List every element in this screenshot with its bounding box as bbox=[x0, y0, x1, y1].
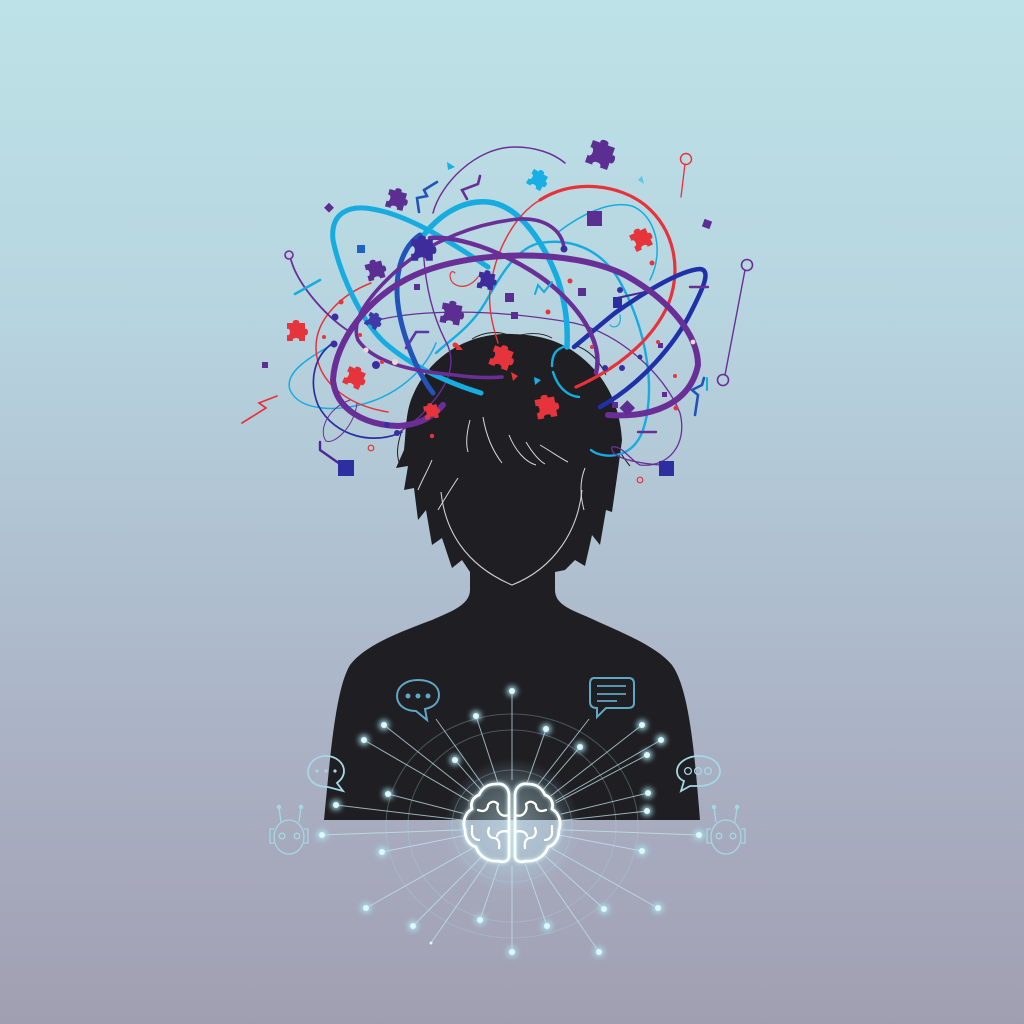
purple squares bbox=[262, 203, 712, 416]
pin red line bbox=[681, 164, 685, 197]
purple inner loop right bbox=[430, 238, 597, 373]
thin dark blue left arc bbox=[313, 343, 402, 438]
blue squares bbox=[338, 245, 674, 476]
thick cyan loop left bbox=[333, 208, 488, 393]
network node glow bbox=[317, 686, 704, 957]
pin right ring top bbox=[742, 260, 752, 270]
thick cyan arc top bbox=[420, 202, 567, 347]
purple puzzle top bbox=[585, 136, 620, 171]
red puzzle left lower bbox=[342, 363, 370, 391]
left purple ring bbox=[285, 251, 293, 259]
red small ring bbox=[368, 445, 374, 451]
red loop bbox=[540, 186, 675, 387]
purple inner loop left bbox=[356, 219, 564, 378]
bottom-left connector bbox=[320, 442, 340, 464]
brain icon glow bbox=[464, 784, 560, 862]
concentric network rings bbox=[386, 714, 638, 938]
pin right ring bottom bbox=[718, 374, 728, 386]
AI network glow bbox=[444, 758, 580, 894]
thin cyan left ellipse bbox=[289, 343, 436, 408]
thin red left arc bbox=[316, 283, 388, 412]
chat bubble top right bbox=[590, 678, 634, 717]
thin purple vertical bbox=[398, 243, 451, 433]
indigo puzzle bbox=[411, 236, 436, 261]
chat bubble right faded bbox=[677, 756, 720, 791]
red puzzle left bbox=[287, 320, 308, 341]
cyan puzzle bbox=[526, 167, 552, 192]
purple dash right top bbox=[690, 286, 708, 288]
red small ring right bbox=[637, 477, 643, 483]
thick dark blue right arc bbox=[574, 269, 705, 407]
thick blue left arc bbox=[397, 235, 433, 393]
network spokes bbox=[322, 691, 699, 952]
indigo puzzle center bbox=[477, 269, 499, 291]
blue zigzag bbox=[417, 182, 437, 212]
decorative pins and zigzags bbox=[242, 154, 752, 483]
pin right bbox=[725, 270, 745, 375]
thin cyan upper loop bbox=[557, 205, 657, 280]
cyan triangles bbox=[447, 162, 644, 385]
red puzzle on head bbox=[488, 342, 518, 372]
cyan curl bbox=[610, 315, 620, 327]
red shards bbox=[456, 343, 518, 381]
pin red ring bbox=[680, 154, 692, 164]
silhouette of person bbox=[324, 333, 700, 820]
brain icon bbox=[464, 784, 560, 862]
purple dash right bottom bbox=[638, 431, 656, 433]
thin cyan loop bbox=[436, 242, 649, 456]
red puzzle right bbox=[628, 224, 656, 252]
confetti squares and dots bbox=[262, 162, 712, 476]
puzzle pieces bbox=[287, 136, 656, 420]
cyan mark right bbox=[706, 378, 708, 390]
purple puzzle bbox=[364, 257, 388, 281]
red fragment bbox=[423, 402, 441, 420]
blue dots bbox=[330, 246, 642, 436]
cyan bar left bbox=[295, 280, 320, 294]
large purple ellipse bbox=[333, 255, 698, 426]
red zigzag bbox=[242, 396, 277, 423]
cyan zigzag center bbox=[535, 282, 552, 294]
stray hair wisps bbox=[398, 333, 630, 466]
thin purple center arc with bottom loop bbox=[378, 312, 682, 465]
purple arrow curve bbox=[433, 147, 565, 213]
chat bubble top left bbox=[397, 680, 439, 720]
purple string from ring bbox=[291, 260, 347, 330]
purple zigzag center bbox=[406, 332, 428, 348]
hair strands bbox=[418, 417, 585, 510]
right cyan dashes on hair bbox=[552, 346, 579, 397]
red dots bbox=[322, 260, 678, 438]
network nodes bbox=[319, 688, 702, 955]
purple puzzle center bbox=[440, 299, 466, 326]
robot right bbox=[707, 805, 745, 854]
small red curl bbox=[450, 272, 478, 286]
face outline bbox=[441, 490, 582, 585]
pale dots bbox=[363, 340, 695, 365]
left small loop bbox=[323, 400, 357, 442]
blue zigzag right bbox=[692, 378, 704, 415]
right purple short link bbox=[617, 292, 645, 298]
chat bubble left faded bbox=[308, 756, 344, 791]
tangled scribbles of thoughts bbox=[289, 147, 705, 465]
purple puzzle bbox=[385, 186, 411, 212]
robot left bbox=[270, 805, 308, 854]
indigo puzzle small bbox=[364, 310, 385, 331]
purple zigzag bbox=[462, 176, 480, 199]
red puzzle on head lower bbox=[534, 393, 561, 419]
thin red continuation bbox=[490, 200, 540, 343]
